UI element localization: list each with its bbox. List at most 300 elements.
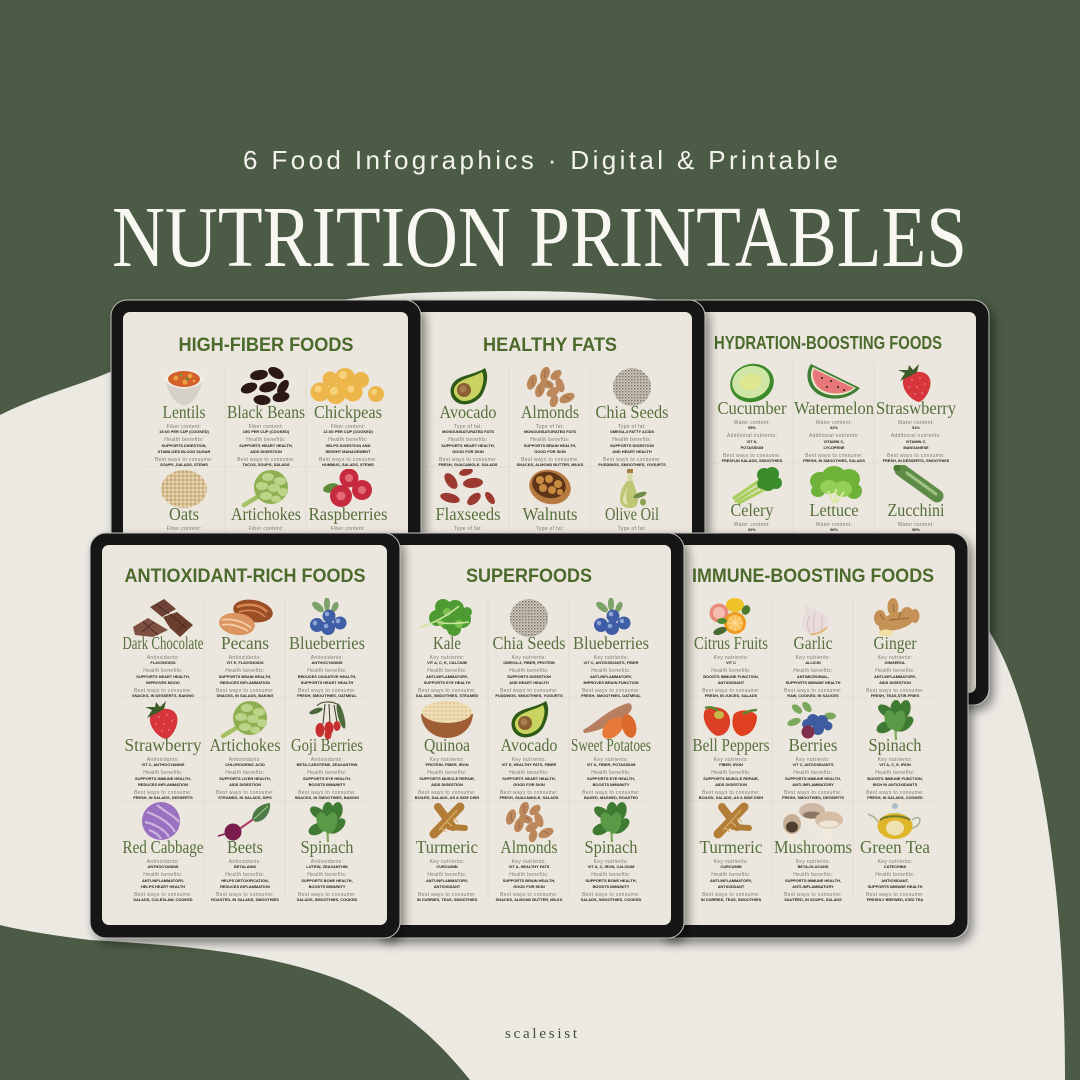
tablet screen	[407, 312, 692, 693]
details: ANTIOXIDANT	[434, 884, 461, 889]
details: SUPPORTS LIVER HEALTH,	[219, 776, 271, 781]
details: VIT C, ANTIOXIDANTS	[792, 762, 834, 767]
details: SUPPORTS IMMUNE HEALTH,	[785, 878, 841, 883]
details: Key nutrients:	[430, 655, 464, 661]
details	[866, 859, 924, 902]
icon: strawberry	[145, 701, 177, 739]
tablet: High-Fiber Foods	[111, 300, 421, 705]
cell: Sweet Potatoes	[571, 703, 651, 800]
details: Key nutrients:	[512, 859, 546, 865]
details: Water content:	[734, 420, 770, 426]
details	[866, 757, 924, 800]
name: Goji Berries	[291, 735, 363, 755]
details: Health benefits:	[793, 668, 833, 674]
details	[701, 859, 762, 902]
name: Avocado	[500, 735, 558, 755]
cell: Zucchini	[888, 464, 944, 532]
tablet frame	[111, 300, 421, 705]
details: BOILED, SALADS, AS A SIDE DISH	[699, 795, 763, 800]
details: Fiber content:	[331, 424, 365, 430]
icon: chickpeas	[310, 368, 384, 404]
tablet: Immune-Boosting Foods	[658, 533, 968, 938]
details	[155, 424, 213, 467]
details: Best ways to consume:	[582, 688, 640, 694]
details: SNACKS, ALMOND BUTTER, MILKS	[517, 462, 584, 467]
name: Spinach	[868, 735, 922, 755]
icon: artichoke	[223, 701, 267, 736]
details: Best ways to consume:	[298, 790, 356, 796]
details: BOOSTS IMMUNE FUNCTION,	[867, 776, 923, 781]
cell: Blueberries	[573, 597, 649, 698]
icon: zucchini	[894, 464, 937, 496]
heading: HEALTHY FATS	[483, 334, 617, 356]
details	[237, 424, 295, 467]
details: AIDS DIGESTION	[879, 680, 911, 685]
name: Spinach	[584, 837, 638, 857]
details: ANTI-INFLAMMATORY,	[426, 674, 468, 679]
details: FRESH, SMOOTHIES, DESSERTS	[782, 795, 844, 800]
tablet: Antioxidant-Rich Foods	[90, 533, 400, 938]
details: Additional nutrients:	[727, 433, 777, 439]
details: 15.6G PER CUP (COOKED)	[159, 429, 210, 434]
cell: Walnuts	[522, 465, 578, 532]
details: Key nutrients:	[594, 655, 628, 661]
name: Raspberries	[308, 504, 388, 524]
name: Artichokes	[231, 504, 301, 524]
icon: walnuts	[525, 465, 575, 509]
details: SUPPORTS BONE HEALTH,	[301, 878, 353, 883]
details: Best ways to consume:	[702, 688, 760, 694]
details	[133, 859, 193, 902]
details: SUPPORTS MUSCLE REPAIR,	[703, 776, 759, 781]
icon: black beans	[239, 364, 291, 406]
heading: SUPERFOODS	[466, 565, 592, 587]
icon: oats	[161, 470, 207, 508]
details: HELPS DETOXIFICATION,	[221, 878, 269, 883]
details: SNACKS, IN SMOOTHIES, BAKING	[295, 795, 359, 800]
details: SUPPORTS BRAIN HEALTH,	[219, 674, 271, 679]
details: ANTI-INFLAMMATORY,	[142, 878, 184, 883]
cell: Artichokes	[231, 470, 301, 532]
tablet screen	[691, 312, 976, 693]
details	[866, 655, 924, 698]
details: ANTIOXIDANT	[718, 884, 745, 889]
details: Best ways to consume:	[418, 688, 476, 694]
details: Best ways to consume:	[216, 790, 274, 796]
cell: Spinach	[297, 801, 358, 902]
details: FLAVONOIDS	[150, 660, 176, 665]
tablet frame	[90, 533, 400, 938]
details: 92%	[830, 425, 838, 430]
details: CURCUMIN	[720, 864, 742, 869]
tablet frame	[374, 533, 684, 938]
details: ANTI-INFLAMMATORY,	[710, 878, 752, 883]
cell: Olive Oil	[605, 469, 659, 532]
details: SUPPORTS HEART HEALTH,	[239, 443, 293, 448]
icon: lentils	[166, 370, 202, 405]
details: Best ways to consume:	[134, 790, 192, 796]
details: ANTIMICROBIAL,	[797, 674, 829, 679]
details: VIT E, FLAVONOIDS	[226, 660, 264, 665]
name: Sweet Potatoes	[571, 735, 651, 755]
tablet screen	[102, 545, 387, 925]
details: SUPPORTS HEART HEALTH,	[136, 674, 190, 679]
background: cream wave	[0, 291, 1065, 1080]
cell: Beets	[211, 803, 279, 902]
details: IN CURRIES, TEAS, SMOOTHIES	[701, 897, 762, 902]
name: Zucchini	[888, 500, 944, 520]
details: Health benefits:	[427, 872, 467, 878]
details: FRESH, IN JUICES, SALADS	[705, 693, 758, 698]
details: SUPPORTS BRAIN HEALTH,	[524, 443, 576, 448]
details: AND HEART HEALTH	[509, 680, 549, 685]
details: SUPPORTS DIGESTION	[507, 674, 551, 679]
details: Best ways to consume:	[216, 688, 274, 694]
details: BOILED, SALADS, AS A SIDE DISH	[415, 795, 479, 800]
icon: dark chocolate	[133, 599, 193, 637]
details	[784, 859, 842, 902]
details: AIDS DIGESTION	[715, 782, 747, 787]
heading: IMMUNE-BOOSTING FOODS	[692, 565, 934, 587]
details: HELPS HEART HEALTH	[141, 884, 185, 889]
details: POTASSIUM	[741, 445, 763, 450]
details: ANTI-INFLAMMATORY,	[874, 674, 916, 679]
details: CATECHINS	[884, 864, 907, 869]
icon: blueberries	[310, 597, 346, 635]
details: Health benefits:	[164, 437, 204, 443]
name: Turmeric	[416, 837, 478, 857]
details: VIT C, ANTIOXIDANTS, FIBER	[584, 660, 639, 665]
icon: garlic	[802, 600, 829, 634]
details: Water content:	[816, 420, 852, 426]
details: Health benefits:	[509, 872, 549, 878]
details: Health benefits:	[427, 668, 467, 674]
details	[495, 655, 563, 698]
details: MONOUNSATURATED FATS	[442, 429, 494, 434]
details: 12.5G PER CUP (COOKED)	[323, 429, 374, 434]
details: Key nutrients:	[878, 859, 912, 865]
details: Key nutrients:	[878, 757, 912, 763]
details: CHLOROGENIC ACID	[225, 762, 265, 767]
cell: Pecans	[216, 597, 275, 698]
details: ANTHOCYANINS	[148, 864, 179, 869]
details: SALADS, SMOOTHIES, STEAMED	[416, 693, 479, 698]
details: SUPPORTS IMMUNE HEALTH	[786, 680, 841, 685]
cell: Almonds	[496, 800, 563, 902]
details	[803, 420, 865, 463]
details: Key nutrients:	[796, 655, 830, 661]
details: Best ways to consume:	[805, 453, 863, 459]
details: BETA-CAROTENE, ZEAXANTHIN	[297, 762, 358, 767]
details: FRESH, IN DESSERTS, SMOOTHIES	[883, 458, 950, 463]
details: FRESH, IN SALADS, DESSERTS	[133, 795, 193, 800]
details: Best ways to consume:	[155, 457, 213, 463]
details: Key nutrients:	[430, 859, 464, 865]
details: REDUCES INFLAMMATION	[220, 680, 270, 685]
cell: Oats	[161, 470, 207, 532]
details: Fiber content:	[331, 526, 365, 532]
name: Bell Peppers	[692, 735, 770, 755]
details: Best ways to consume:	[237, 457, 295, 463]
details: SUPPORTS IMMUNE HEALTH,	[135, 776, 191, 781]
details	[581, 655, 642, 698]
cell: Chickpeas	[310, 368, 384, 467]
details: Water content:	[898, 420, 934, 426]
details: Antioxidants:	[147, 655, 179, 661]
details: Additional nutrients:	[809, 433, 859, 439]
details: Key nutrients:	[512, 655, 546, 661]
details: MANGANESE	[903, 445, 929, 450]
details: Fiber content:	[167, 526, 201, 532]
cell: Dark Chocolate	[122, 599, 204, 698]
details: OMEGA-3 FATTY ACIDS	[610, 429, 655, 434]
details: SNACKS, ALMOND BUTTER, MILKS	[496, 897, 563, 902]
details: BAKED, MASHED, ROASTED	[584, 795, 638, 800]
details: FRESH,IN SALADS, SMOOTHIES	[722, 458, 783, 463]
tablet frame	[679, 300, 989, 705]
name: Mushrooms	[774, 837, 852, 857]
details: 92%	[748, 527, 756, 532]
subtitle: 6 Food Infographics · Digital & Printable	[243, 145, 838, 175]
details: 95%	[748, 425, 756, 430]
cell: Spinach	[866, 699, 924, 800]
details: LYCOPENE	[823, 445, 845, 450]
details	[133, 757, 193, 800]
icon: beets	[218, 803, 270, 840]
details: Health benefits:	[225, 770, 265, 776]
details	[699, 757, 763, 800]
details: Best ways to consume:	[723, 453, 781, 459]
name: Chia Seeds	[492, 633, 566, 653]
details: VIT C, ANTHOCYANINS	[142, 762, 185, 767]
icon: avocado	[451, 368, 487, 404]
details: FRESH, SMOOTHIES, OATMEAL	[297, 693, 358, 698]
name: Pecans	[221, 633, 269, 653]
details: Key nutrients:	[714, 655, 748, 661]
details: Antioxidants:	[147, 757, 179, 763]
name: Citrus Fruits	[694, 633, 768, 653]
details: Best ways to consume:	[887, 453, 945, 459]
icon: green tea	[868, 803, 920, 839]
details: FRESH, GUACAMOLE, SALADS	[438, 462, 498, 467]
details	[417, 859, 478, 902]
name: Ginger	[874, 633, 917, 653]
details: VIT A, C, K, CALCIUM	[427, 660, 467, 665]
details: GOOD FOR SKIN	[513, 782, 545, 787]
details: Fiber content:	[167, 424, 201, 430]
cell: Artichokes	[210, 701, 280, 800]
details: Key nutrients:	[714, 757, 748, 763]
tablet frame	[658, 533, 968, 938]
details: VIT E, HEALTHY FATS, FIBER	[502, 762, 556, 767]
icon: ginger	[874, 598, 920, 636]
details: Best ways to consume:	[298, 892, 356, 898]
details: Best ways to consume:	[418, 790, 476, 796]
cell: Raspberries	[308, 468, 388, 532]
cell: Bell Peppers	[692, 707, 770, 800]
details: Health benefits:	[509, 668, 549, 674]
details: AIDS DIGESTION	[431, 782, 463, 787]
details: Health benefits:	[530, 437, 570, 443]
details: PUDDINGS, SMOOTHIES, YOGURTS	[495, 693, 563, 698]
name: Chia Seeds	[596, 402, 668, 422]
details: AIDS DIGESTION	[250, 449, 282, 454]
name: Watermelon	[794, 398, 874, 418]
details: ANTI-INFLAMMATORY	[792, 884, 834, 889]
heading: ANTIOXIDANT-RICH FOODS	[124, 565, 366, 587]
details: GOOD FOR SKIN	[534, 449, 566, 454]
details: Best ways to consume:	[784, 790, 842, 796]
name: Celery	[730, 500, 774, 520]
cell: Turmeric	[700, 807, 762, 902]
details: IMPROVES MOOD	[146, 680, 180, 685]
details: Health benefits:	[225, 872, 265, 878]
details	[883, 420, 950, 463]
details: SOUPS ,SALADS, STEWS	[160, 462, 208, 467]
details: Antioxidants:	[229, 655, 261, 661]
tablet screen	[123, 312, 408, 693]
details	[297, 859, 358, 902]
details: Health benefits:	[246, 437, 286, 443]
icon: sweet potatoes	[583, 703, 639, 743]
icon: berries	[786, 700, 836, 738]
details: SUPPORTS EYE HEALTH,	[587, 776, 635, 781]
details: STEAMED, IN SALADS, DIPS	[218, 795, 272, 800]
details: Health benefits:	[448, 437, 488, 443]
details: Best ways to consume:	[582, 790, 640, 796]
icon: lettuce	[810, 466, 862, 503]
icon: quinoa	[421, 701, 473, 738]
icon: spinach	[875, 699, 916, 740]
details: BOOSTS IMMUNITY	[309, 884, 346, 889]
details: SUPPORTS IMMUNE HEALTH,	[785, 776, 841, 781]
details: GOOD FOR SKIN	[452, 449, 484, 454]
details: SALADS, SMOOTHIES, COOKED	[297, 897, 358, 902]
name: Oats	[169, 504, 199, 524]
details: Best ways to consume:	[216, 892, 274, 898]
details: Key nutrients:	[796, 859, 830, 865]
details: 96%	[830, 527, 838, 532]
details: ANTI-INFLAMMATORY	[792, 782, 834, 787]
details: Fiber content:	[249, 424, 283, 430]
cell: Cucumber	[718, 359, 787, 463]
details	[702, 655, 760, 698]
tablet: Hydration-Boosting Foods	[679, 300, 989, 705]
details: Health benefits:	[143, 872, 183, 878]
details: FRESH, GUACAMOLE, SALADS	[499, 795, 559, 800]
details: Health benefits:	[711, 872, 751, 878]
details: Health benefits:	[143, 770, 183, 776]
name: Black Beans	[227, 402, 305, 422]
details	[216, 757, 274, 800]
name: Almonds	[500, 837, 558, 857]
details: Health benefits:	[509, 770, 549, 776]
details: ANTIOXIDANT	[718, 680, 745, 685]
details: AND HEART HEALTH	[612, 449, 652, 454]
cell: Mushrooms	[774, 803, 852, 902]
name: Blueberries	[573, 633, 649, 653]
details: Best ways to consume:	[418, 892, 476, 898]
details	[496, 859, 563, 902]
details	[211, 859, 279, 902]
details: WEIGHT MANAGEMENT	[326, 449, 371, 454]
name: Kale	[433, 633, 461, 653]
details: 96%	[912, 527, 920, 532]
details: Type of fat:	[454, 424, 482, 430]
details: VIT A, C, IRON, CALCIUM	[588, 864, 634, 869]
details: LUTEIN, ZEAXANTHIN	[306, 864, 348, 869]
name: Straswberry	[876, 398, 956, 418]
details: IMPROVES BRAIN FUNCTION	[583, 680, 639, 685]
details: Antioxidants:	[229, 757, 261, 763]
details: RICH IN ANTIOXIDANTS	[873, 782, 918, 787]
details: FIBER, IRON	[719, 762, 743, 767]
icon: avocado	[512, 701, 548, 737]
details: SNACKS, IN DESSERTS, BAKING	[132, 693, 194, 698]
details: Type of fat:	[536, 526, 564, 532]
details: ROASTED, IN SALADS, SMOOTHIES	[211, 897, 279, 902]
details	[415, 757, 479, 800]
details: BETALAINS	[234, 864, 256, 869]
name: Flaxseeds	[436, 504, 500, 524]
details: Water content:	[734, 522, 770, 528]
details: CURCUMIN	[436, 864, 458, 869]
details	[722, 420, 783, 463]
details: HUMMUS, SALADS, STEWS	[322, 462, 374, 467]
details: Type of fat:	[454, 526, 482, 532]
icon: raspberries	[322, 468, 372, 507]
details: SUPPORTS IMMUNE HEALTH	[868, 884, 923, 889]
cell: Citrus Fruits	[694, 598, 768, 698]
icon: turmeric	[434, 807, 465, 834]
details: SUPPORTS DIGESTION,	[162, 443, 206, 448]
name: Turmeric	[700, 837, 762, 857]
name: Quinoa	[424, 735, 470, 755]
details: Best ways to consume:	[134, 688, 192, 694]
name: Berries	[788, 735, 838, 755]
cell: Chia Seeds	[492, 599, 566, 698]
details: SUPPORTS EYE HEALTH,	[303, 776, 351, 781]
icon: cucumber	[726, 359, 778, 407]
details: Health benefits:	[591, 872, 631, 878]
icon: red cabbage	[142, 802, 180, 840]
icon: chia seeds	[510, 599, 548, 637]
details: SUPPORTS HEART HEALTH,	[441, 443, 495, 448]
details: Health benefits:	[875, 668, 915, 674]
details: IN CURRIES, TEAS, SMOOTHIES	[417, 897, 478, 902]
name: Almonds	[521, 402, 579, 422]
details: ANTI-INFLAMMATORY,	[426, 878, 468, 883]
cell: Turmeric	[416, 807, 478, 902]
details: Best ways to consume:	[866, 892, 924, 898]
details	[898, 522, 934, 532]
details: Additional nutrients:	[891, 433, 941, 439]
name: Red Cabbage	[122, 837, 204, 857]
details: FRESH, IN SALADS, COOKED	[867, 795, 923, 800]
cell: Avocado	[438, 368, 498, 467]
heading: HYDRATION-BOOSTING FOODS	[714, 333, 942, 353]
details: Type of fat:	[618, 424, 646, 430]
details	[416, 655, 479, 698]
cell: Lettuce	[810, 466, 862, 532]
details: PUDDINGS, SMOOTHIES, YOGURTS	[598, 462, 666, 467]
details: Best ways to consume:	[784, 892, 842, 898]
icon: pecans	[218, 597, 275, 637]
details: Best ways to consume:	[500, 790, 558, 796]
details: OMEGA-3, FIBER, PROTEIN	[503, 660, 555, 665]
details: SUPPORTS EYE HEALTH	[424, 680, 471, 685]
details: HELPS DIGESTION AND	[326, 443, 371, 448]
